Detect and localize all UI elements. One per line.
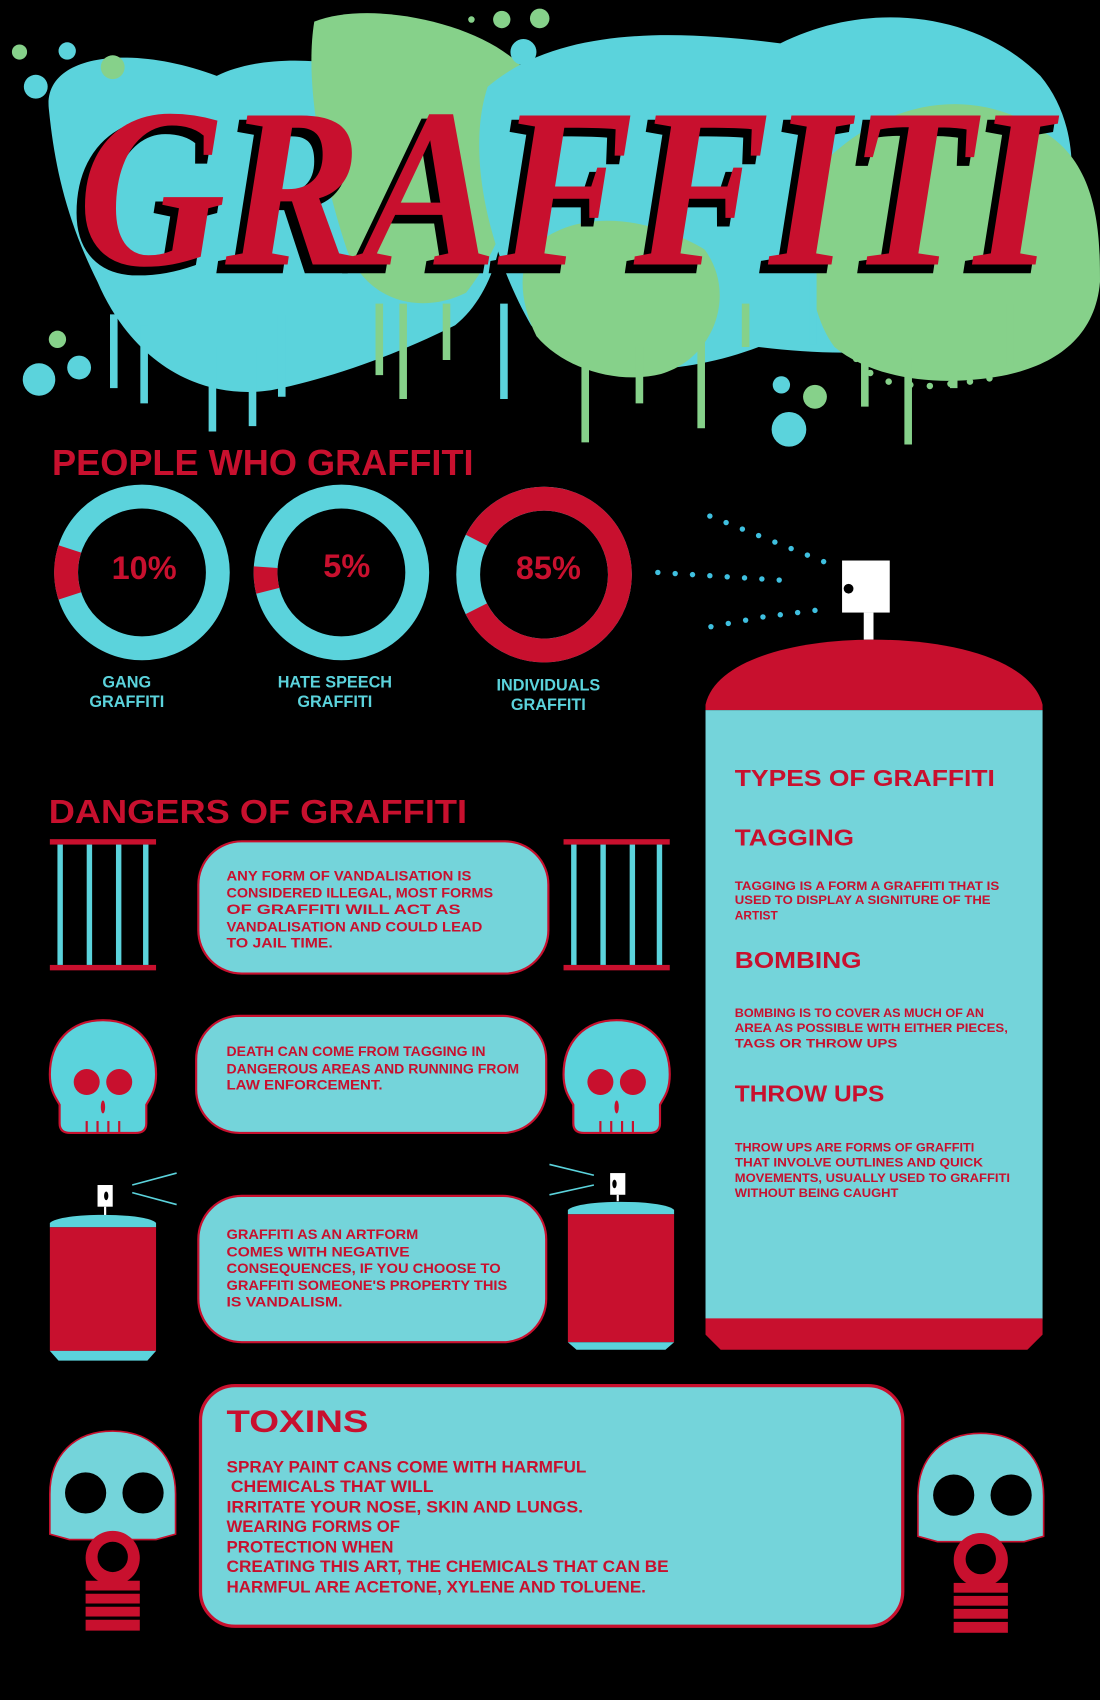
text box: artform: CONSEQUENCES, IF YOU CHOOSE TO [227, 1261, 501, 1276]
spray dots [655, 513, 826, 629]
icon: gas mask skull right [918, 1433, 1044, 1633]
icon: jail bars left [50, 839, 156, 970]
icon: skull left [50, 1020, 156, 1133]
panel: toxins: CHEMICALS THAT WILL [231, 1477, 433, 1496]
panel: types of graffiti spray can: WITHOUT BEING CAUGHT [735, 1186, 899, 1200]
text box: death: LAW ENFORCEMENT. [227, 1078, 383, 1093]
panel: toxins: WEARING FORMS OF [227, 1517, 400, 1536]
donut: hate speech 5%: 5% [323, 548, 370, 584]
panel: types of graffiti spray can: TYPES OF GRAFFITI [735, 765, 995, 791]
text box: artform: IS VANDALISM. [227, 1294, 342, 1309]
panel: types of graffiti spray can: USED TO DISPLAY A SIGNITURE OF THE [735, 893, 991, 907]
text box: illegal: OF GRAFFITI WILL ACT AS [227, 902, 461, 917]
text box: death [196, 1016, 546, 1133]
panel: types of graffiti spray can [706, 561, 1043, 1350]
panel: types of graffiti spray can: TAGS OR THROW UPS [735, 1036, 897, 1050]
text box: illegal: ANY FORM OF VANDALISATION IS [227, 868, 471, 883]
icon: spray can right [549, 1164, 674, 1350]
panel: toxins [200, 1386, 903, 1626]
text box: artform: COMES WITH NEGATIVE [227, 1245, 410, 1260]
donut: gang 10%: GRAFFITI [89, 693, 164, 711]
heading: dangers of graffiti: DANGERS OF GRAFFITI [49, 794, 467, 831]
panel: types of graffiti spray can: BOMBING IS TO COVER AS MUCH OF AN [735, 1006, 984, 1020]
donut: gang 10%: 10% [112, 550, 177, 586]
panel: toxins: IRRITATE YOUR NOSE, SKIN AND LUNGS. [227, 1497, 583, 1516]
panel: types of graffiti spray can: THAT INVOLVE OUTLINES AND QUICK [735, 1156, 983, 1170]
heading: people who graffiti: PEOPLE WHO GRAFFITI [52, 443, 474, 483]
panel: types of graffiti spray can: AREA AS POSSIBLE WITH EITHER PIECES, [735, 1021, 1008, 1035]
donut: gang 10%: GANG [102, 673, 151, 691]
icon: spray can left [50, 1173, 177, 1361]
text box: illegal: TO JAIL TIME. [227, 936, 333, 951]
panel: toxins: SPRAY PAINT CANS COME WITH HARMFUL [227, 1457, 586, 1476]
panel: types of graffiti spray can: THROW UPS [735, 1081, 884, 1107]
donut: hate speech 5% [249, 480, 433, 711]
donut: individuals 85%: GRAFFITI [511, 696, 586, 714]
donut: individuals 85%: 85% [516, 550, 581, 586]
donut: individuals 85% [442, 473, 646, 714]
panel: types of graffiti spray can: MOVEMENTS, USUALLY USED TO GRAFFITI [735, 1171, 1010, 1185]
text box: artform [198, 1196, 546, 1342]
panel: toxins: HARMFUL ARE ACETONE, XYLENE AND TOLUENE. [227, 1578, 646, 1597]
text box: artform: GRAFFITI AS AN ARTFORM [227, 1227, 418, 1242]
donut: hate speech 5%: GRAFFITI [297, 693, 372, 711]
panel: toxins: PROTECTION WHEN [227, 1538, 393, 1557]
icon: gas mask skull left [50, 1431, 176, 1631]
donut: individuals 85%: INDIVIDUALS [496, 677, 600, 695]
panel: toxins: CREATING THIS ART, THE CHEMICALS THAT CAN BE [227, 1557, 669, 1576]
panel: types of graffiti spray can: ARTIST [735, 908, 778, 922]
text box: illegal: VANDALISATION AND COULD LEAD [227, 919, 483, 934]
icon: jail bars right [564, 839, 670, 970]
donut: gang 10% [46, 477, 238, 711]
panel: toxins: TOXINS [227, 1404, 368, 1439]
panel: types of graffiti spray can: BOMBING [735, 947, 862, 973]
icon: skull right [564, 1020, 670, 1133]
text box: death: DEATH CAN COME FROM TAGGING IN [227, 1044, 486, 1059]
title splash background [12, 9, 1100, 447]
text box: death: DANGEROUS AREAS AND RUNNING FROM [227, 1061, 519, 1076]
panel: types of graffiti spray can: TAGGING [735, 825, 854, 851]
panel: types of graffiti spray can: TAGGING IS A FORM A GRAFFITI THAT IS [735, 879, 999, 893]
text box: illegal: CONSIDERED ILLEGAL, MOST FORMS [227, 886, 493, 901]
donut: hate speech 5%: HATE SPEECH [278, 673, 392, 691]
text box: illegal [198, 841, 548, 974]
text box: artform: GRAFFITI SOMEONE'S PROPERTY THIS [227, 1278, 507, 1293]
panel: types of graffiti spray can: THROW UPS ARE FORMS OF GRAFFITI [735, 1140, 974, 1154]
